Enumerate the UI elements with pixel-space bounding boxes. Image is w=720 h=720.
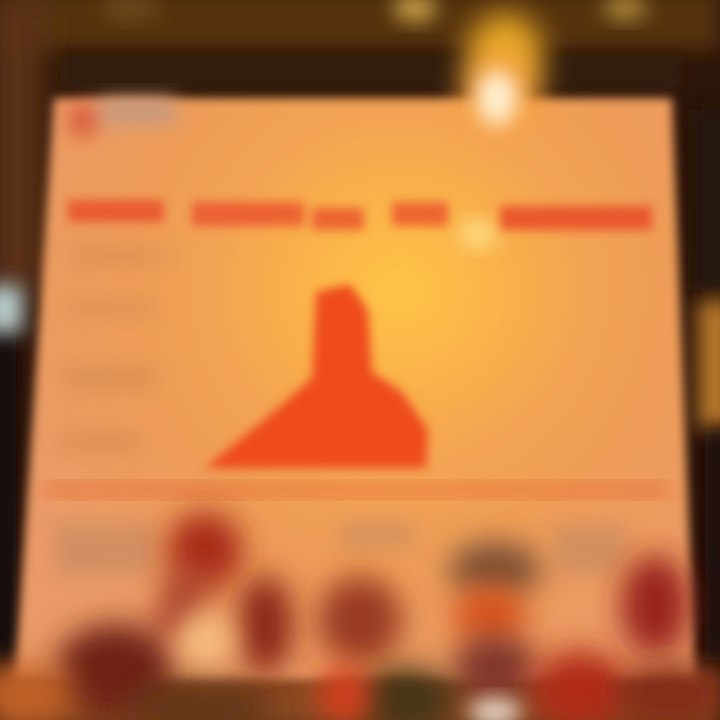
corner flag mark — [70, 98, 175, 135]
poster sheet — [15, 98, 695, 680]
left text blocks — [60, 250, 170, 450]
lamp glare — [460, 13, 543, 247]
divider band — [45, 484, 670, 496]
bottom text columns — [55, 524, 625, 574]
red silhouette figure — [205, 284, 428, 468]
title — [68, 200, 652, 230]
ceiling lights — [100, 0, 647, 22]
crowd raised hands — [0, 512, 720, 720]
